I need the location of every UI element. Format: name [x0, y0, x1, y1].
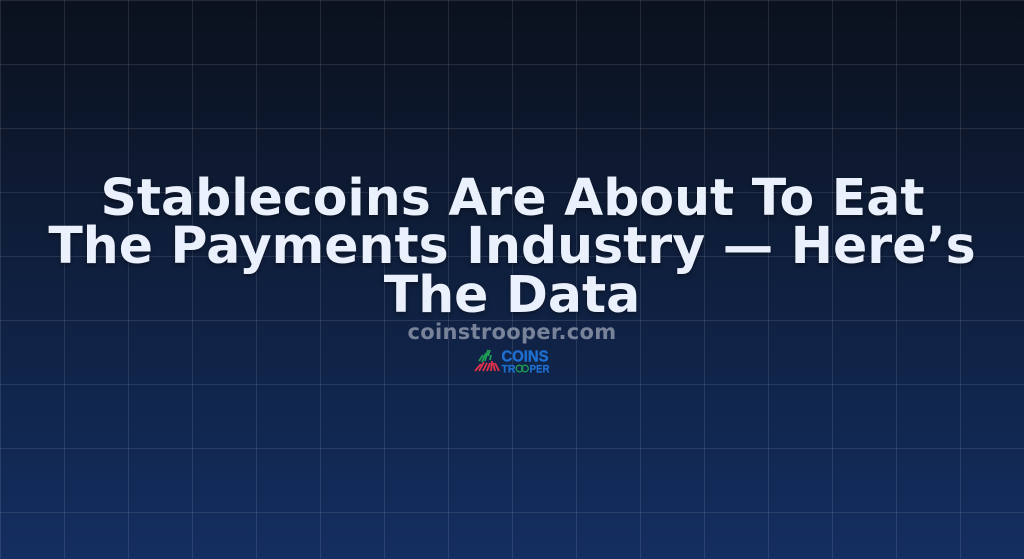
wordmark: TROOPER	[502, 364, 550, 376]
logo: Coins Trooper	[474, 348, 550, 374]
title	[48, 168, 976, 324]
source website text: coinstrooper.com	[408, 320, 616, 344]
wordmark: COINS: COINS	[502, 348, 548, 366]
title: The Payments Industry — Here’s	[48, 216, 976, 275]
title: The Data	[384, 264, 640, 324]
title: Stablecoins Are About To Eat	[100, 168, 924, 226]
icon: green and red chart peaks	[475, 350, 499, 371]
